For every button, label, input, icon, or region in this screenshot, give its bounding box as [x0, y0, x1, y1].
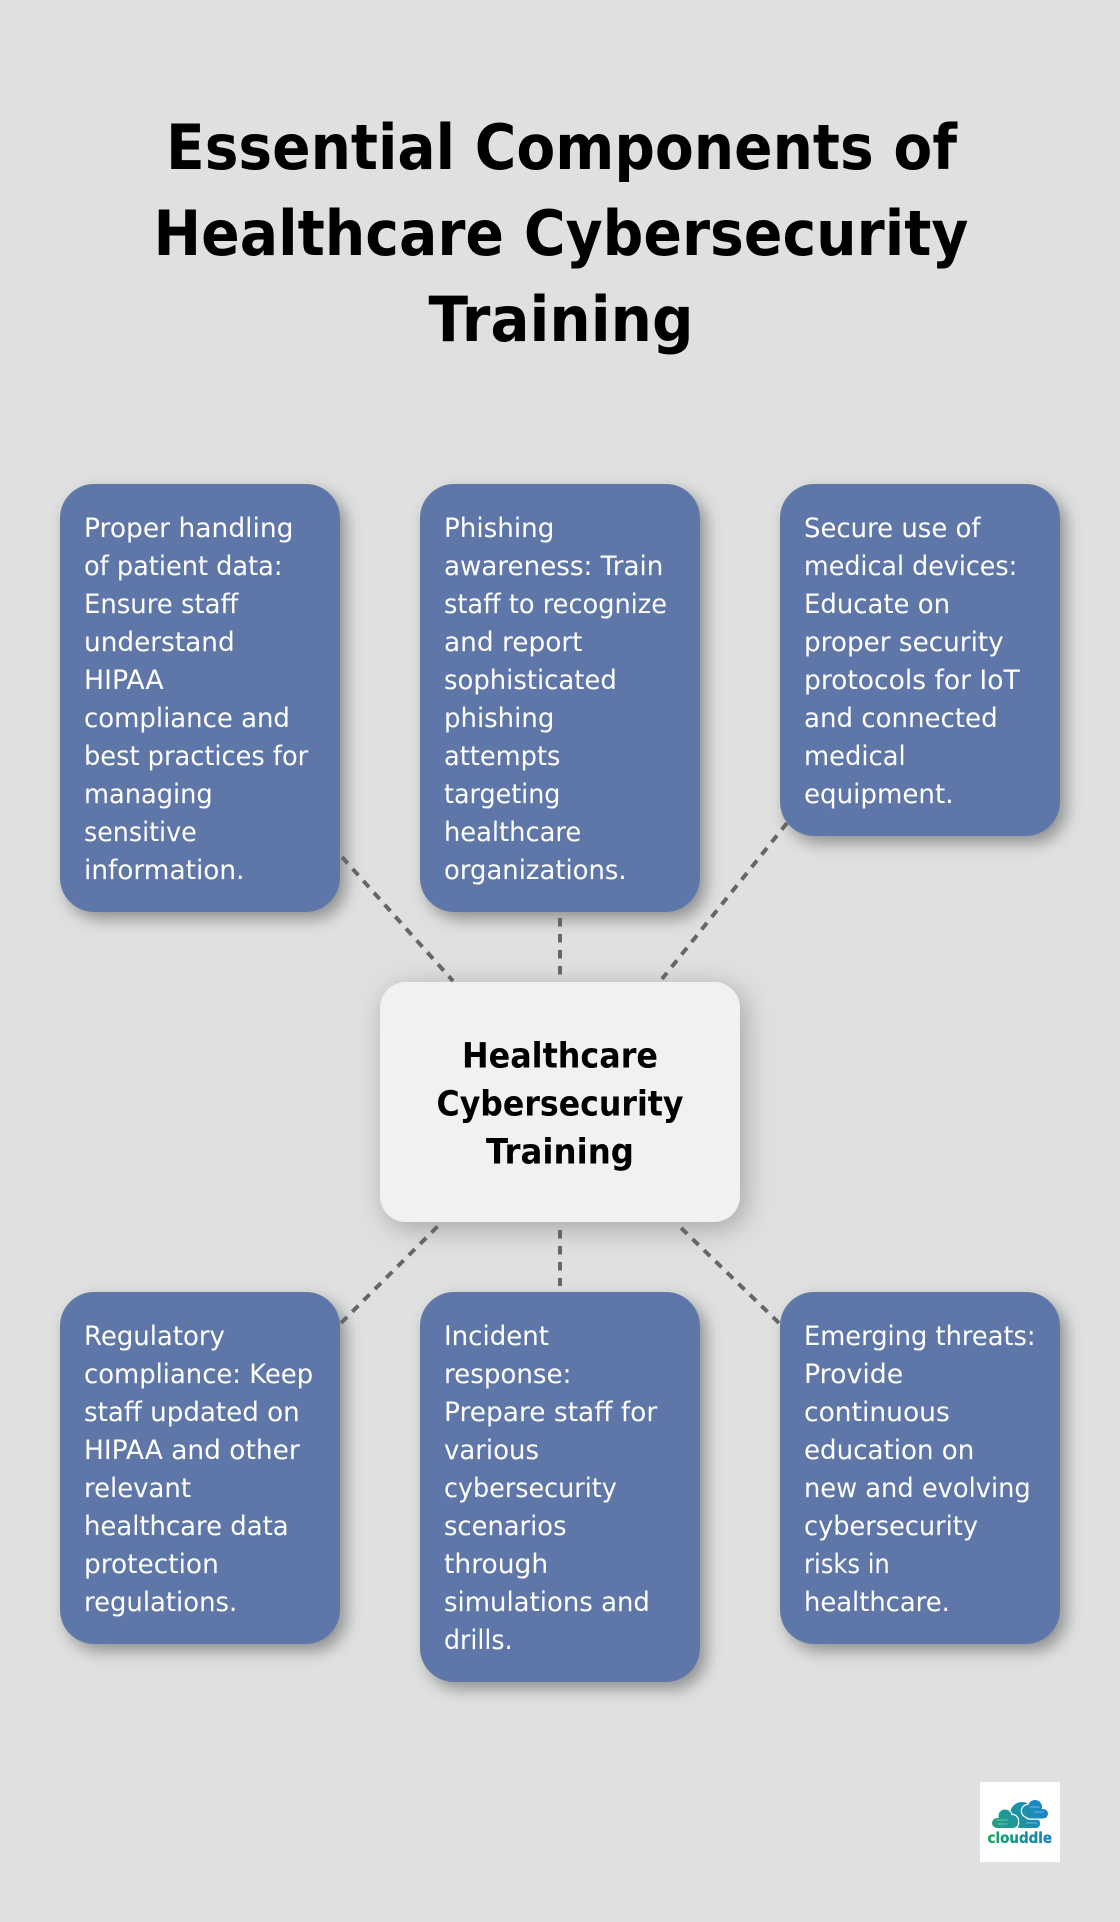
- panel: regulatory compliance: healthcare data: [84, 1511, 289, 1542]
- panel: incident response: [420, 1292, 700, 1682]
- panel: incident response: cybersecurity: [444, 1473, 617, 1504]
- panel: regulatory compliance: compliance: Keep: [84, 1359, 313, 1390]
- panel: proper handling of patient data: best practices for: [84, 741, 309, 772]
- panel: incident response: through: [444, 1549, 548, 1580]
- panel: phishing awareness: attempts: [444, 741, 560, 772]
- title: Essential Components of: [166, 111, 958, 184]
- panel: incident response: drills.: [444, 1625, 513, 1656]
- panel: proper handling of patient data: [60, 484, 340, 912]
- panel: central node: Cybersecurity: [436, 1084, 684, 1124]
- panel: regulatory compliance: staff updated on: [84, 1397, 300, 1428]
- panel: phishing awareness: [420, 484, 700, 912]
- panel: proper handling of patient data: Ensure staff: [84, 589, 240, 620]
- title: Training: [428, 283, 694, 356]
- panel: phishing awareness: healthcare: [444, 817, 581, 848]
- panel: emerging threats: Emerging threats:: [804, 1321, 1036, 1352]
- panel: incident response: response:: [444, 1359, 571, 1390]
- panel: secure use of medical devices: and connected: [804, 703, 998, 734]
- panel: central node: [380, 982, 740, 1222]
- panel: phishing awareness: sophisticated: [444, 665, 617, 696]
- panel: phishing awareness: targeting: [444, 779, 560, 810]
- panel: secure use of medical devices: Secure use of: [804, 513, 982, 544]
- logo: clouddle: [980, 1782, 1060, 1862]
- panel: proper handling of patient data: managing: [84, 779, 213, 810]
- panel: regulatory compliance: protection: [84, 1549, 219, 1580]
- panel: regulatory compliance: Regulatory: [84, 1321, 225, 1352]
- panel: emerging threats: education on: [804, 1435, 974, 1466]
- panel: regulatory compliance: regulations.: [84, 1587, 237, 1618]
- panel: phishing awareness: organizations.: [444, 855, 627, 886]
- panel: secure use of medical devices: medical: [804, 741, 906, 772]
- panel: incident response: Prepare staff for: [444, 1397, 658, 1428]
- title: [154, 111, 968, 356]
- panel: secure use of medical devices: medical devices:: [804, 551, 1017, 582]
- panel: incident response: Incident: [444, 1321, 549, 1352]
- logo wordmark: clouddle: [988, 1829, 1052, 1847]
- panel: regulatory compliance: [60, 1292, 340, 1644]
- panel: proper handling of patient data: sensitive: [84, 817, 197, 848]
- icon: clouds: [992, 1800, 1048, 1828]
- panel: incident response: simulations and: [444, 1587, 650, 1618]
- panel: incident response: scenarios: [444, 1511, 566, 1542]
- panel: phishing awareness: phishing: [444, 703, 554, 734]
- panel: emerging threats: continuous: [804, 1397, 950, 1428]
- panel: phishing awareness: Phishing: [444, 513, 554, 544]
- panel: proper handling of patient data: understand: [84, 627, 235, 658]
- panel: central node: Healthcare: [462, 1036, 658, 1076]
- panel: secure use of medical devices: proper security: [804, 627, 1004, 658]
- panel: secure use of medical devices: protocols for IoT: [804, 665, 1020, 696]
- panel: proper handling of patient data: Proper handling: [84, 513, 294, 544]
- panel: proper handling of patient data: information.: [84, 855, 244, 886]
- panel: emerging threats: cybersecurity: [804, 1511, 978, 1542]
- panel: emerging threats: healthcare.: [804, 1587, 950, 1618]
- title: Healthcare Cybersecurity: [154, 197, 968, 270]
- panel: phishing awareness: and report: [444, 627, 582, 658]
- panel: secure use of medical devices: Educate on: [804, 589, 950, 620]
- panel: regulatory compliance: HIPAA and other: [84, 1435, 301, 1466]
- panel: emerging threats: Provide: [804, 1359, 903, 1390]
- panel: proper handling of patient data: compliance and: [84, 703, 290, 734]
- connectors: dashed lines from center node to panels: [341, 823, 787, 1323]
- panel: incident response: various: [444, 1435, 539, 1466]
- panel: emerging threats: new and evolving: [804, 1473, 1031, 1504]
- panel: secure use of medical devices: [780, 484, 1060, 836]
- panel: emerging threats: risks in: [804, 1549, 890, 1580]
- panel: emerging threats: [780, 1292, 1060, 1644]
- panel: regulatory compliance: relevant: [84, 1473, 191, 1504]
- panel: central node: Training: [486, 1132, 634, 1172]
- panel: secure use of medical devices: equipment.: [804, 779, 954, 810]
- panel: proper handling of patient data: HIPAA: [84, 665, 164, 696]
- panel: phishing awareness: staff to recognize: [444, 589, 667, 620]
- panel: proper handling of patient data: of patient data:: [84, 551, 282, 582]
- panel: phishing awareness: awareness: Train: [444, 551, 663, 582]
